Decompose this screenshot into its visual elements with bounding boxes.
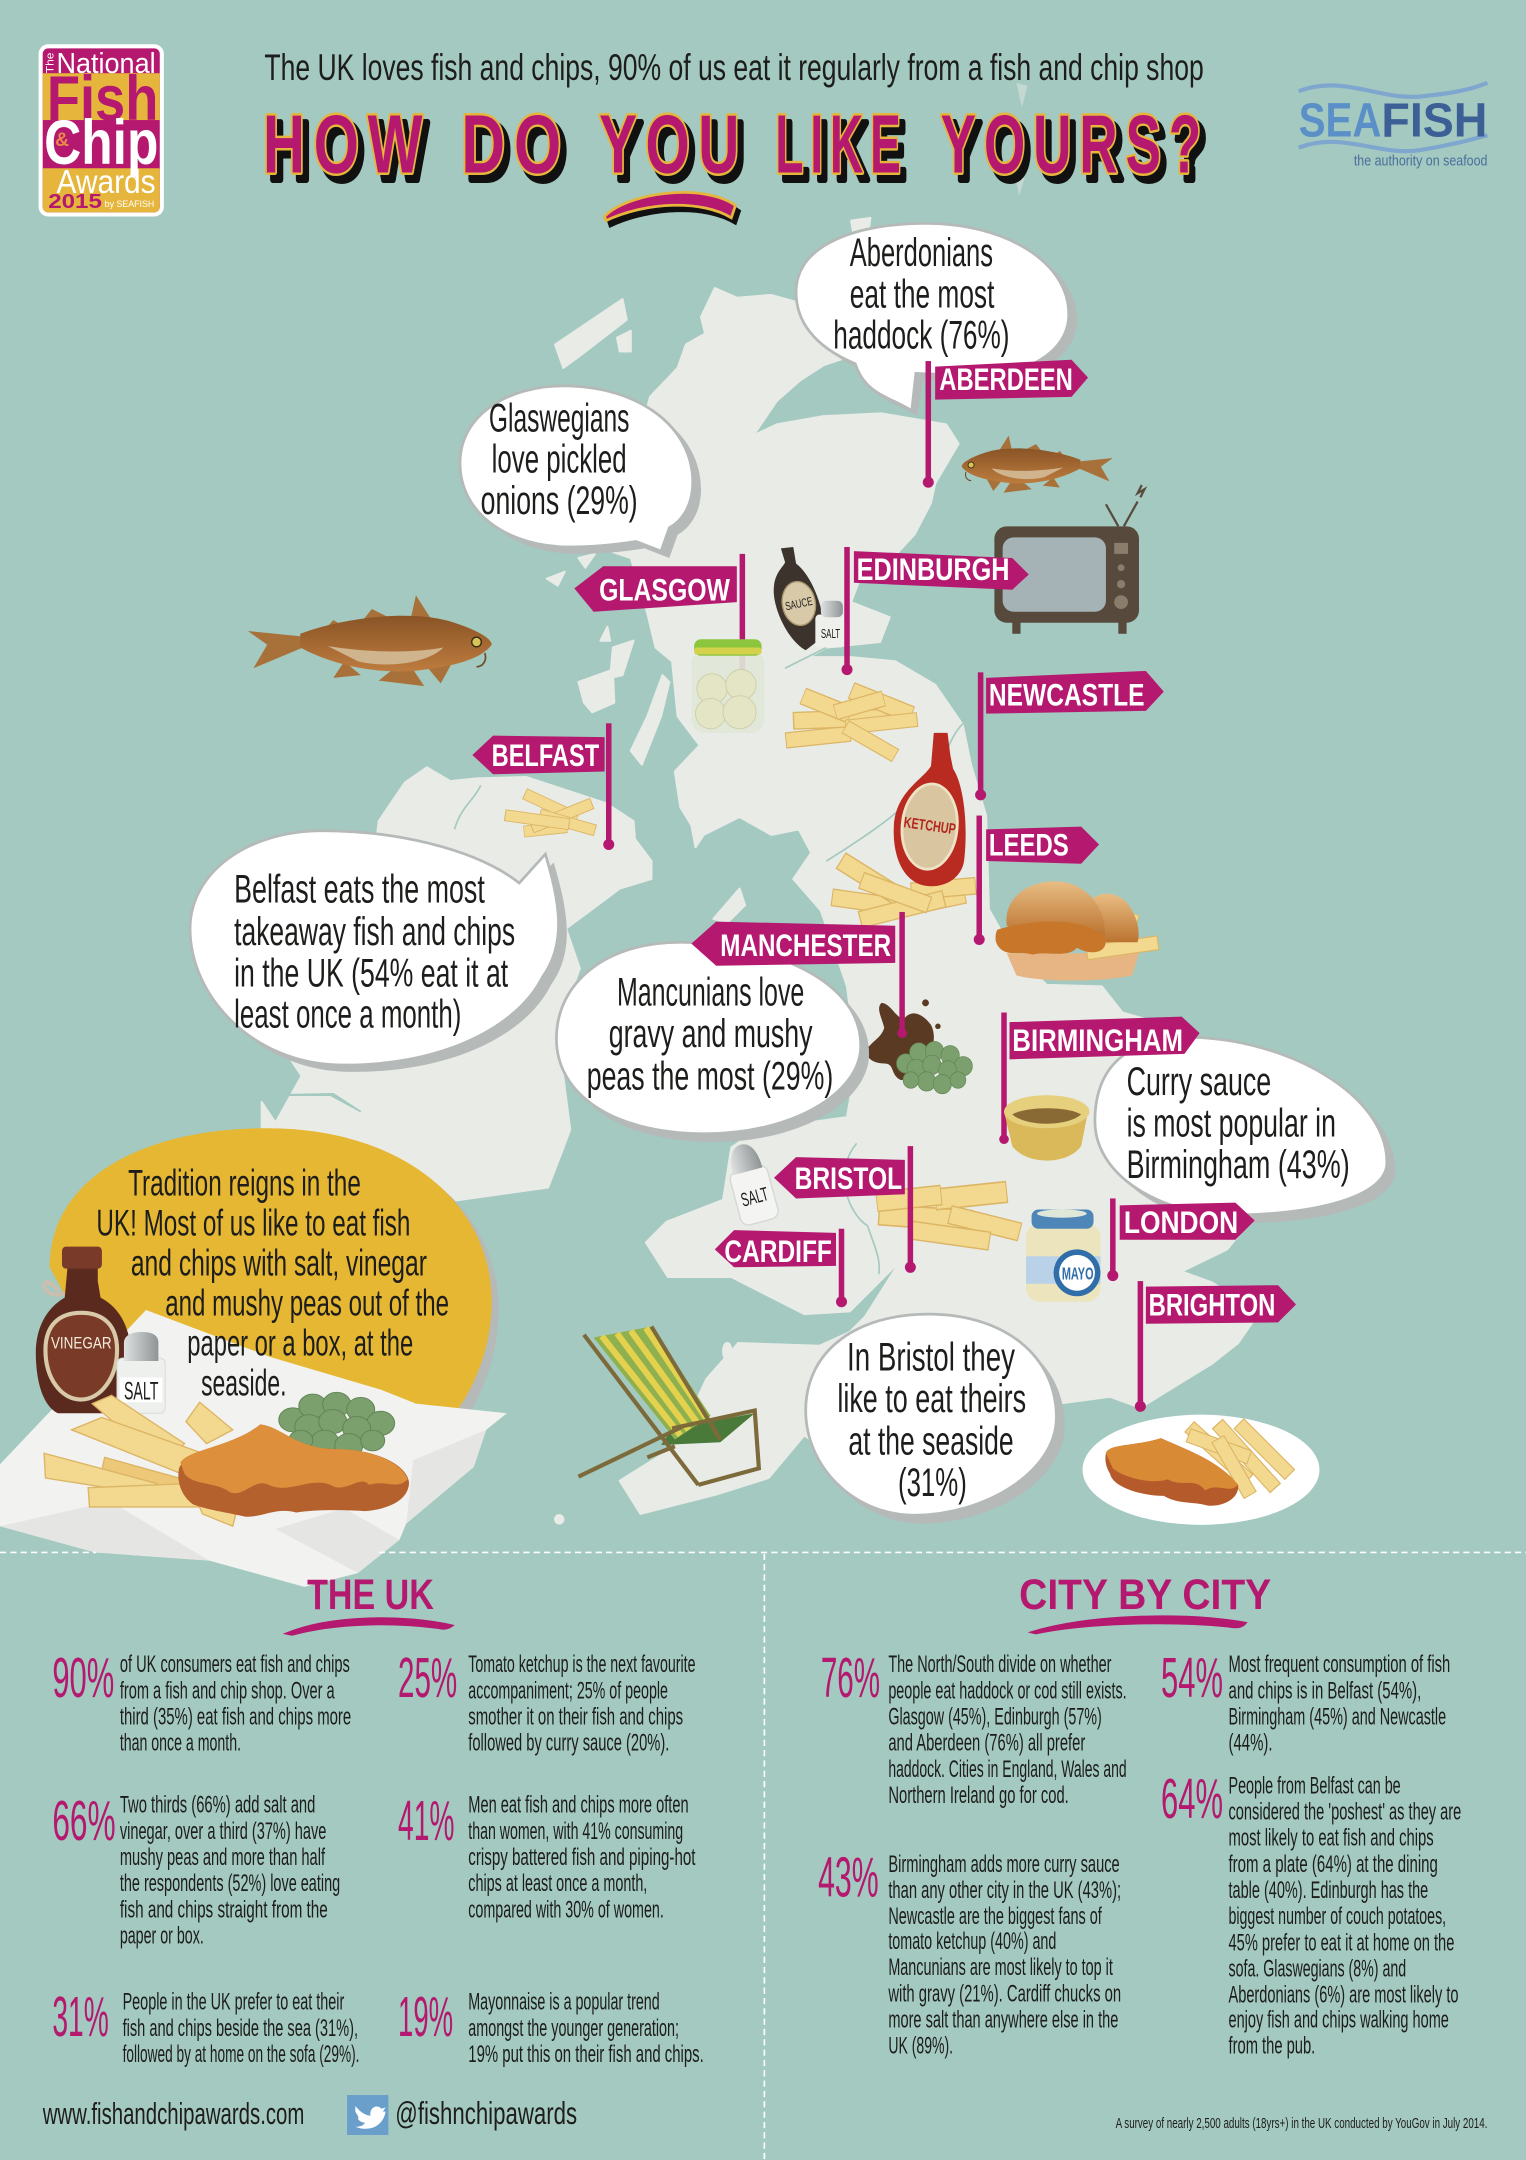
- icon: plate of fish and chips: [1083, 1415, 1319, 1525]
- stat: 90%: [52, 1646, 351, 1757]
- stat: 64%: People from Belfast can be: [1229, 1772, 1401, 1799]
- stat: 64%: 64%: [1161, 1767, 1223, 1830]
- stat: 66%: mushy peas and more than half: [120, 1844, 325, 1871]
- flag: Bristol: BRISTOL: [795, 1160, 902, 1196]
- stat: 41%: Men eat fish and chips more often: [468, 1792, 689, 1819]
- icon: sauce bottle and salt: SALT: [821, 626, 840, 641]
- flag: London: LONDON: [1124, 1204, 1238, 1240]
- flag: Belfast: [472, 723, 614, 850]
- stat: 64%: [1161, 1767, 1461, 2060]
- bubble: Aberdeen: [796, 223, 1077, 416]
- stat: 76%: Glasgow (45%), Edinburgh (57%): [888, 1704, 1102, 1731]
- flag: Cardiff: CARDIFF: [724, 1233, 832, 1269]
- logo: National Fish and Chip Awards 2015: [39, 44, 164, 216]
- stat: 43%: with gravy (21%). Cardiff chucks on: [888, 1980, 1121, 2007]
- main title: HOW: [263, 97, 431, 190]
- bubble: Bristol: (31%): [898, 1461, 967, 1505]
- paper wrapping: [0, 1310, 507, 1587]
- stat: 43%: Birmingham adds more curry sauce: [888, 1851, 1120, 1878]
- stat: 54%: (44%).: [1229, 1730, 1273, 1757]
- stat: 76%: haddock. Cities in England, Wales and: [888, 1756, 1127, 1783]
- flag: Birmingham: BIRMINGHAM: [1012, 1022, 1183, 1058]
- stat: 19%: 19%: [398, 1985, 453, 2048]
- flag: London: [1107, 1198, 1255, 1281]
- callout: tradition reigns: seaside.: [201, 1361, 286, 1403]
- flag: Glasgow: GLASGOW: [599, 572, 730, 608]
- section divider: [0, 1552, 1526, 2160]
- main title: LIKE: [781, 104, 913, 197]
- icon: chips in Belfast: [504, 789, 596, 837]
- icon: pickled onion jar: [691, 639, 764, 733]
- heading: The UK: THE UK: [307, 1571, 434, 1619]
- main title: [263, 97, 1215, 197]
- icon: twitter: [347, 2095, 388, 2135]
- stat: 43%: Newcastle are the biggest fans of: [888, 1903, 1102, 1930]
- stat: 43%: 43%: [818, 1846, 879, 1909]
- bubble: Aberdeen: eat the most: [850, 272, 994, 316]
- stat: 25%: followed by curry sauce (20%).: [468, 1730, 669, 1757]
- bubble: Belfast: Belfast eats the most: [234, 867, 485, 911]
- icon: gravy splat: [858, 999, 941, 1080]
- bubble: Belfast: takeaway fish and chips: [234, 910, 515, 954]
- stat: 41%: 41%: [398, 1789, 454, 1852]
- Seafish logo: [1299, 83, 1487, 170]
- icon: sauce bottle and salt: SAUCE: [784, 595, 814, 613]
- stat: 43%: tomato ketchup (40%) and: [888, 1928, 1056, 1955]
- stat: 66%: Two thirds (66%) add salt and: [120, 1792, 315, 1819]
- flag: Glasgow: [574, 554, 745, 678]
- stat: 54%: [1161, 1646, 1450, 1757]
- logo: National Fish and Chip Awards 2015: by SEAFISH: [105, 199, 154, 210]
- bubble: Belfast: [190, 831, 567, 1072]
- icon: salt shaker: [722, 1140, 780, 1227]
- bubble: Bristol: [806, 1314, 1065, 1523]
- stat: 76%: [821, 1646, 1127, 1809]
- flag: Bristol: [774, 1146, 916, 1273]
- logo: National Fish and Chip Awards 2015: Chip: [44, 108, 158, 178]
- stat: 19%: Mayonnaise is a popular trend: [468, 1989, 660, 2016]
- stat: 19%: amongst the younger generation;: [468, 2015, 679, 2042]
- main title: DO: [461, 97, 570, 190]
- flag: Belfast: BELFAST: [492, 737, 599, 773]
- flag: Edinburgh: [842, 547, 1029, 675]
- bubble: Belfast: least once a month): [234, 993, 461, 1037]
- flag: Aberdeen: [923, 360, 1088, 488]
- twitter handle: @fishnchipawards: [395, 2095, 577, 2131]
- icon: mayonnaise jar: MAYO: [1062, 1264, 1094, 1284]
- stat: 66%: vinegar, over a third (37%) have: [120, 1818, 326, 1845]
- main title: YOURS?: [941, 97, 1209, 190]
- icon: vinegar bottle: [36, 1247, 131, 1413]
- logo: National Fish and Chip Awards 2015: Fish: [47, 64, 158, 134]
- icon: fish burger: [995, 881, 1159, 980]
- icon: ketchup bottle: KETCHUP: [903, 814, 957, 838]
- callout: tradition reigns: and chips with salt, vinegar: [131, 1242, 427, 1284]
- logo: National Fish and Chip Awards 2015: &: [55, 130, 69, 151]
- icon: mayonnaise jar: [1026, 1209, 1100, 1302]
- stat: 31%: [52, 1985, 359, 2068]
- icon: chips near Newcastle: [785, 683, 918, 761]
- logo: National Fish and Chip Awards 2015: Awards: [56, 164, 156, 201]
- stat: 90%: third (35%) eat fish and chips more: [120, 1704, 351, 1731]
- stat: 43%: more salt than anywhere else in the: [888, 2007, 1118, 2034]
- stat: 66%: fish and chips straight from the: [120, 1896, 328, 1923]
- stat: 90%: 90%: [52, 1646, 114, 1709]
- icon: mushy peas: [897, 1041, 972, 1094]
- Seafish logo: the authority on seafood: [1354, 153, 1487, 170]
- stat: 19%: [398, 1985, 704, 2068]
- icon: small fish: [962, 435, 1113, 493]
- stat: 41%: crispy battered fish and piping-hot: [468, 1844, 696, 1871]
- stat: 43%: [818, 1846, 1121, 2060]
- stat: 66%: [52, 1789, 340, 1950]
- callout: tradition reigns: UK! Most of us like to eat fish: [96, 1202, 410, 1244]
- icon: television: [994, 485, 1144, 634]
- logo: National Fish and Chip Awards 2015: The: [45, 53, 57, 73]
- stat: 25%: 25%: [398, 1646, 457, 1709]
- callout: tradition reigns: Tradition reigns in the: [128, 1162, 361, 1204]
- bubble: Glasgow: onions (29%): [481, 479, 638, 523]
- icon: sauce bottle and salt: [774, 547, 844, 650]
- main title: YOU: [605, 104, 753, 197]
- flag: Leeds: LEEDS: [989, 827, 1069, 863]
- bubble: Manchester: [556, 942, 869, 1142]
- icon: deck chair: [578, 1327, 759, 1485]
- main title: DO: [467, 104, 576, 197]
- flag: Newcastle: NEWCASTLE: [989, 676, 1144, 712]
- map of the UK and Ireland: [262, 218, 1253, 1523]
- bubble: Glasgow: Glaswegians: [489, 396, 629, 440]
- icon: curry sauce pot: [1004, 1095, 1089, 1161]
- bubble: Manchester: peas the most (29%): [587, 1055, 833, 1099]
- icon: fish and chips on paper: [44, 1392, 409, 1526]
- stat: 25%: smother it on their fish and chips: [468, 1704, 683, 1731]
- stat: 31%: fish and chips beside the sea (31%),: [123, 2015, 358, 2042]
- stat: 64%: sofa. Glaswegians (8%) and: [1229, 1956, 1406, 1983]
- flag: Brighton: [1135, 1281, 1296, 1412]
- stat: 25%: [398, 1646, 696, 1757]
- bubble: Birmingham: is most popular in: [1127, 1101, 1336, 1145]
- stat: 43%: Mancunians are most likely to top it: [888, 1954, 1113, 1981]
- logo: National Fish and Chip Awards 2015: National: [56, 48, 156, 80]
- flag: Cardiff: [715, 1229, 847, 1307]
- bubble: Belfast: in the UK (54% eat it at: [234, 951, 508, 995]
- bubble: Aberdeen: haddock (76%): [833, 314, 1010, 358]
- title underline swoosh: [605, 192, 740, 226]
- stat: 41%: compared with 30% of women.: [468, 1896, 664, 1923]
- main title: YOU: [599, 97, 748, 190]
- icon: large fish: [248, 595, 492, 686]
- stat: 43%: UK (89%).: [888, 2033, 953, 2060]
- icon: vinegar bottle: VINEGAR: [51, 1334, 112, 1353]
- callout: tradition reigns: [0, 1128, 507, 1587]
- stat: 31%: 31%: [52, 1985, 109, 2048]
- stat: 90%: of UK consumers eat fish and chips: [120, 1651, 350, 1678]
- stat: 25%: Tomato ketchup is the next favourite: [468, 1651, 696, 1678]
- callout: tradition reigns: and mushy peas out of the: [165, 1282, 449, 1324]
- bubble: Manchester: Mancunians love: [617, 971, 804, 1015]
- stat: 43%: than any other city in the UK (43%);: [888, 1877, 1121, 1904]
- icon: salt shaker with vinegar: [117, 1332, 165, 1413]
- bubble: Birmingham: Curry sauce: [1127, 1060, 1271, 1104]
- stat: 76%: 76%: [821, 1646, 880, 1709]
- bubble: Aberdeen: Aberdonians: [850, 231, 993, 275]
- bubble: Birmingham: Birmingham (43%): [1127, 1143, 1350, 1187]
- stat: 31%: followed by at home on the sofa (29%).: [123, 2041, 359, 2068]
- bubble: Glasgow: love pickled: [492, 438, 627, 482]
- stat: 19%: 19% put this on their fish and chips.: [468, 2041, 704, 2068]
- stat: 31%: People in the UK prefer to eat their: [123, 1989, 344, 2016]
- Seafish logo: FISH: [1381, 94, 1487, 148]
- stat: 64%: from the pub.: [1229, 2033, 1315, 2060]
- stat: 41%: [398, 1789, 696, 1923]
- Seafish logo: SEA: [1299, 94, 1381, 148]
- website address: www.fishandchipawards.com: [42, 2098, 304, 2131]
- flag: Manchester: MANCHESTER: [720, 927, 891, 963]
- flag: Leeds: [974, 816, 1099, 945]
- stat: 90%: than once a month.: [120, 1730, 241, 1757]
- bubble: Bristol: In Bristol they: [847, 1336, 1015, 1380]
- icon: salt shaker: SALT: [739, 1184, 771, 1212]
- stat: 66%: 66%: [52, 1789, 116, 1852]
- main title: YOURS?: [946, 104, 1215, 197]
- bubble: Birmingham: [1095, 1037, 1395, 1223]
- stat: 25%: accompaniment; 25% of people: [468, 1677, 668, 1704]
- bubble: Manchester: gravy and mushy: [609, 1012, 813, 1056]
- stat: 41%: chips at least once a month,: [468, 1870, 647, 1897]
- icon: chips near Bristol: [876, 1182, 1022, 1250]
- stat: 41%: than women, with 41% consuming: [468, 1818, 683, 1845]
- icon: chips near Leeds: [831, 853, 976, 928]
- stat: 76%: people eat haddock or cod still exists.: [888, 1677, 1127, 1704]
- flag: Edinburgh: EDINBURGH: [857, 551, 1010, 587]
- stat: 76%: The North/South divide on whether: [888, 1651, 1111, 1678]
- heading: The UK: [285, 1571, 453, 1635]
- flag: Manchester: [691, 912, 907, 1038]
- bubble: Bristol: at the seaside: [848, 1420, 1014, 1464]
- rivers: [262, 648, 981, 1274]
- bubble: Glasgow: [460, 386, 701, 558]
- stat: 66%: the respondents (52%) love eating: [120, 1870, 340, 1897]
- stat: 90%: from a fish and chip shop. Over a: [120, 1677, 335, 1704]
- logo: National Fish and Chip Awards 2015: 2015: [48, 190, 102, 213]
- heading: City by city: CITY BY CITY: [1019, 1571, 1271, 1619]
- icon: salt shaker with vinegar: SALT: [124, 1379, 158, 1406]
- flag: Brighton: BRIGHTON: [1149, 1287, 1275, 1323]
- callout: tradition reigns: paper or a box, at the: [187, 1321, 413, 1363]
- flag: Birmingham: [999, 1013, 1200, 1144]
- main title: HOW: [269, 104, 437, 197]
- stat: 76%: Northern Ireland go for cod.: [888, 1782, 1069, 1809]
- flag: Aberdeen: ABERDEEN: [939, 361, 1073, 397]
- Shetland islands: [1015, 83, 1027, 196]
- flag: Newcastle: [975, 671, 1164, 800]
- stat: 54%: 54%: [1161, 1646, 1223, 1709]
- stat: 76%: and Aberdeen (76%) all prefer: [888, 1730, 1085, 1757]
- stat: 66%: paper or box.: [120, 1923, 204, 1950]
- bubble: Bristol: like to eat theirs: [837, 1377, 1026, 1421]
- icon: ketchup bottle: [894, 733, 966, 886]
- main title: LIKE: [775, 97, 908, 190]
